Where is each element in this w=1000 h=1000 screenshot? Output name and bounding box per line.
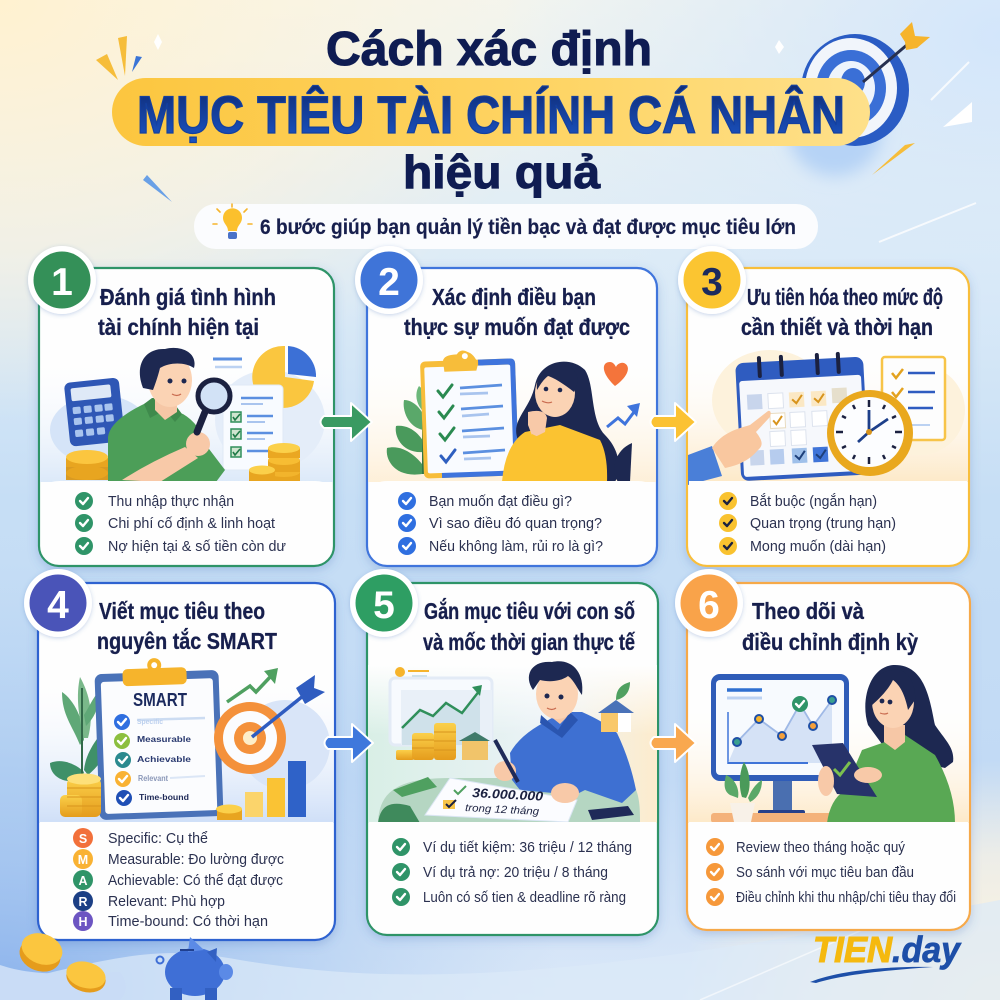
list: step 6: Điều chỉnh khi thu nhập/chi tiêu thay đổi — [736, 890, 956, 906]
panel: step 2 — [355, 246, 657, 566]
heading: step 4 — [97, 598, 278, 654]
list: step 4: Specific: Cụ thể — [108, 830, 208, 847]
list: step 2 — [369, 481, 655, 555]
title highlight pill — [112, 78, 870, 146]
list: step 1 — [41, 481, 332, 555]
heading: step 6: Theo dõi và — [752, 598, 865, 624]
SMART checklist: Time-bound — [139, 792, 189, 802]
coin stacks — [396, 723, 456, 760]
note with goal amount: 36.000.000 — [472, 785, 544, 804]
illustration: writing numeric goal — [368, 661, 657, 825]
arrow: step 5 to 6 — [650, 724, 696, 762]
arrow: step 2 to 3 — [650, 403, 696, 441]
list: step 5: Luôn có số tien & deadline rõ ràng — [423, 890, 626, 906]
logo: TIEN.day: TIEN — [813, 929, 893, 970]
person with magnifier — [108, 348, 230, 482]
illustration: financial review — [40, 346, 333, 482]
illustration: goals checklist — [368, 349, 656, 482]
heading: step 2: thực sự muốn đạt được — [404, 314, 630, 340]
SMART checklist: Relevant — [138, 774, 168, 783]
list: step 3 — [689, 481, 967, 555]
illustration: SMART clipboard: SMART — [133, 690, 187, 710]
logo: TIEN.day — [810, 929, 962, 983]
subtitle text: 6 bước giúp bạn quản lý tiền bạc và đạt được mục tiêu lớn — [260, 216, 796, 239]
SMART checklist: Achievable — [137, 755, 192, 764]
woman with tablet — [812, 665, 955, 823]
list: step 4: Relevant: Phù hợp — [108, 893, 225, 910]
list: step 5: Ví dụ tiết kiệm: 36 triệu / 12 tháng — [423, 840, 632, 856]
heading: step 2 — [404, 284, 630, 340]
list: step 5 — [369, 822, 656, 906]
clock — [827, 390, 913, 476]
badge: 2: 2 — [378, 261, 400, 304]
bars — [245, 761, 306, 817]
badge: 6 — [675, 569, 743, 637]
list: step 3: Bắt buộc (ngắn hạn) — [750, 493, 877, 510]
heading: step 6: điều chỉnh định kỳ — [742, 629, 918, 655]
decorative sparks — [96, 34, 976, 242]
heading: step 3: cần thiết và thời hạn — [741, 314, 933, 340]
panel: step 6 — [675, 569, 970, 930]
house and plant — [598, 682, 634, 732]
icon: coins bottom left — [0, 928, 126, 1000]
title line 2: MỤC TIÊU TÀI CHÍNH CÁ NHÂN — [137, 84, 845, 145]
heading: step 5: Gắn mục tiêu với con số — [424, 597, 635, 624]
list: step 4 — [40, 822, 333, 931]
badge: 4: 4 — [47, 584, 69, 627]
badge: 1 — [28, 246, 96, 314]
heading: step 5: và mốc thời gian thực tế — [423, 629, 636, 655]
heading: step 1: tài chính hiện tại — [98, 314, 259, 340]
list: step 6: Review theo tháng hoặc quý — [736, 840, 906, 856]
list: step 5: Ví dụ trả nợ: 20 triệu / 8 tháng — [423, 865, 608, 881]
list: step 6: So sánh với mục tiêu ban đầu — [736, 865, 914, 881]
SMART checklist: Measurable — [137, 735, 192, 744]
list: step 4: M — [78, 853, 88, 867]
hand pointing — [688, 411, 771, 485]
chart board — [390, 667, 492, 745]
badge: 5: 5 — [373, 584, 395, 627]
list: step 4: H — [78, 915, 88, 929]
list: step 2: Nếu không làm, rủi ro là gì? — [429, 539, 603, 555]
badge: 1: 1 — [51, 261, 73, 304]
heading: step 5 — [423, 597, 636, 655]
list: step 2: Vì sao điều đó quan trọng? — [429, 516, 602, 532]
subtitle pill — [194, 204, 818, 249]
man writing — [510, 661, 636, 803]
panel: step 5 — [350, 569, 658, 935]
title line 3: hiệu quả — [403, 146, 600, 198]
list: step 1: Nợ hiện tại & số tiền còn dư — [108, 539, 286, 555]
woman thinking — [502, 362, 619, 482]
badge: 4 — [24, 569, 92, 637]
heading: step 4: Viết mục tiêu theo — [99, 598, 265, 624]
list: step 4: R — [78, 895, 88, 909]
note with goal amount: trong 12 tháng — [465, 802, 540, 818]
note with goal amount — [425, 778, 577, 822]
monitor — [711, 674, 849, 817]
panel: step 4 — [24, 569, 335, 940]
illustration: monitoring progress — [688, 665, 969, 823]
list: step 1: Chi phí cố định & linh hoạt — [108, 516, 275, 532]
SMART checklist — [114, 714, 205, 806]
list: step 4: Achievable: Có thể đạt được — [108, 872, 283, 889]
list: step 1: Thu nhập thực nhận — [108, 494, 234, 510]
badge: 6: 6 — [698, 584, 720, 627]
list: step 4: Time-bound: Có thời hạn — [108, 913, 268, 930]
illustration: SMART clipboard — [39, 656, 334, 823]
target — [214, 675, 325, 774]
arrow: step 4 to 5 — [324, 724, 373, 762]
icon: piggy bank — [156, 937, 233, 1000]
decorative target with arrow — [787, 22, 930, 176]
list: step 3: Quan trọng (trung hạn) — [750, 516, 896, 532]
heading: step 1: Đánh giá tình hình — [100, 284, 276, 310]
badge: 3: 3 — [701, 261, 723, 304]
badge: 5 — [350, 569, 418, 637]
arrow: step 1 to 2 — [320, 403, 372, 441]
list: step 4: S — [79, 832, 87, 846]
list: step 2: Bạn muốn đạt điều gì? — [429, 494, 572, 510]
heading: step 1 — [98, 284, 276, 340]
list: step 6 — [689, 822, 968, 906]
badge: 2 — [355, 246, 423, 314]
heading: step 6 — [742, 598, 918, 655]
panel: step 3 — [678, 246, 969, 566]
badge: 3 — [678, 246, 746, 314]
potted plant — [725, 762, 762, 822]
heading: step 2: Xác định điều bạn — [432, 284, 596, 310]
heading: step 3 — [741, 284, 943, 340]
list: step 4: A — [78, 874, 88, 888]
coins — [60, 778, 101, 817]
SMART checklist: Specific — [137, 719, 163, 726]
house — [459, 732, 490, 760]
list: step 3: Mong muốn (dài hạn) — [750, 539, 886, 555]
illustration: calendar and clock — [688, 350, 968, 485]
panel: step 1 — [28, 246, 334, 566]
title line 1: Cách xác định — [326, 23, 652, 76]
list: step 4: Measurable: Đo lường được — [108, 851, 284, 868]
heading: step 4: nguyên tắc SMART — [97, 627, 278, 654]
icon: light bulb — [213, 204, 252, 239]
logo: TIEN.day: .day — [892, 929, 962, 970]
